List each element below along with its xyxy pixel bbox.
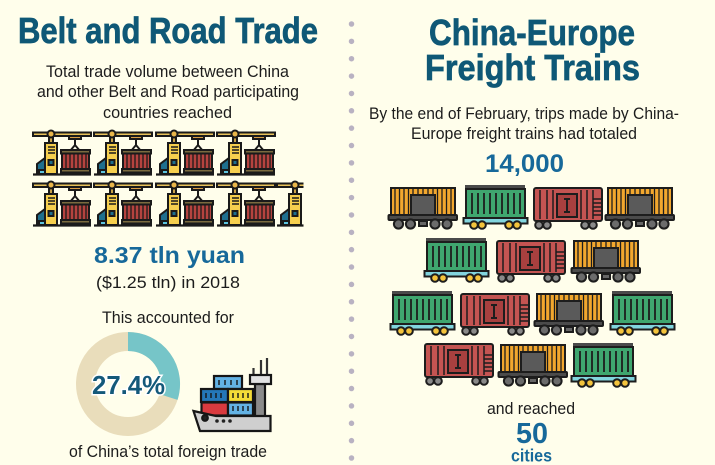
icon: container ship — [194, 358, 271, 431]
heading: China-Europe Freight Trains: Freight Trains — [425, 47, 640, 88]
panel: China-Europe freight trains — [369, 12, 684, 465]
panel: Belt and Road trade — [18, 10, 335, 461]
icon grid: port cranes — [33, 130, 335, 226]
intro text: Europe freight trains had totaled — [411, 125, 637, 143]
reach lead-in: and reached — [487, 400, 575, 418]
share lead-in: This accounted for — [102, 309, 234, 327]
intro text: By the end of February, trips made by China- — [369, 105, 679, 123]
share caption: of China’s total foreign trade — [69, 443, 267, 461]
donut value: 27.4% — [92, 370, 165, 400]
heading: China-Europe Freight Trains: China-Europe — [429, 12, 635, 53]
trade value: 8.37 tln yuan — [94, 242, 245, 268]
heading: Belt and Road Trade: Belt and Road Trade — [18, 10, 318, 51]
trips total: 14,000 — [485, 150, 564, 178]
cities label: cities — [511, 446, 552, 465]
intro text: countries reached — [103, 104, 232, 122]
donut chart: 27.4% — [86, 341, 171, 426]
icon grid: freight wagons — [388, 185, 674, 387]
intro text: Total trade volume between China — [46, 63, 290, 81]
trade value in dollars: ($1.25 tln) in 2018 — [96, 273, 240, 292]
cities count: 50 — [516, 418, 548, 450]
intro text: and other Belt and Road participating — [37, 83, 299, 101]
